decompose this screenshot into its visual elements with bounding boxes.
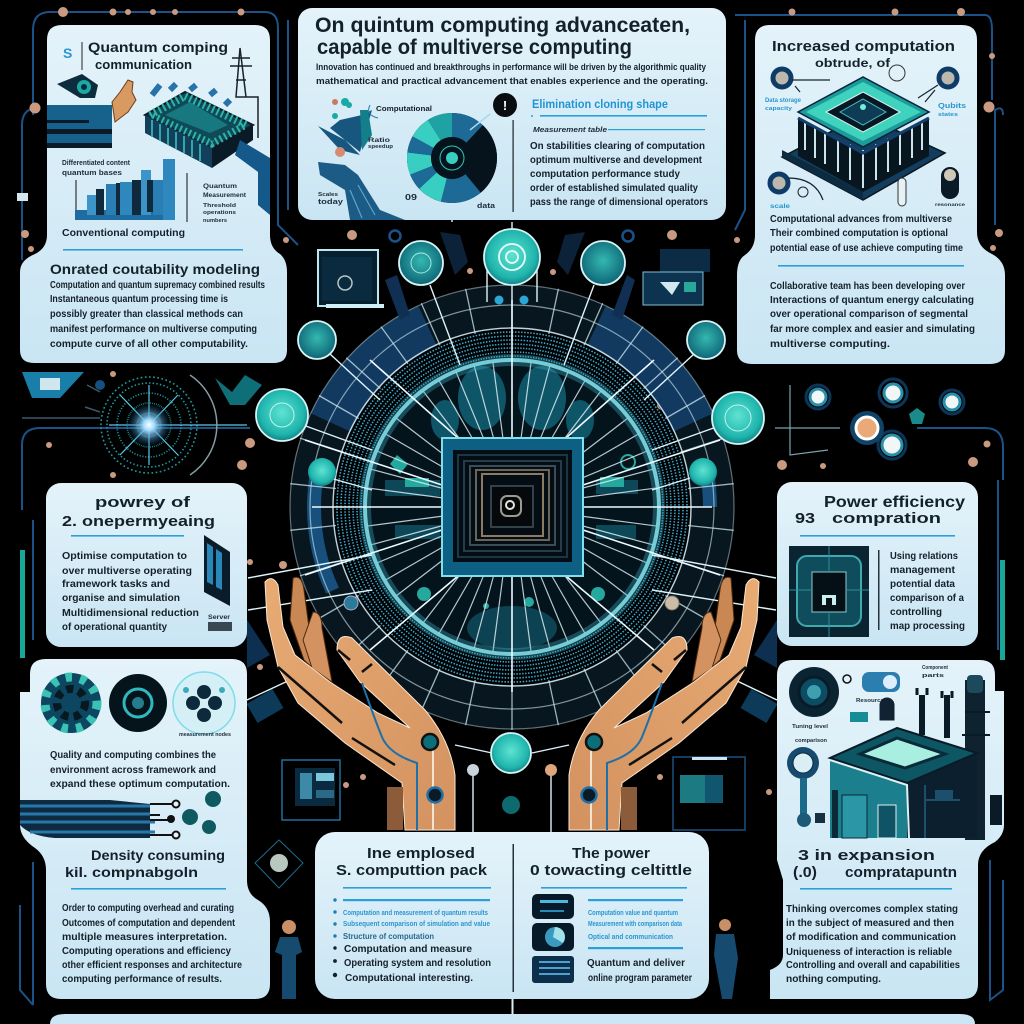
left title: S. computtion pack <box>336 862 488 879</box>
body text lower: Order to computing overhead and curating <box>62 902 234 914</box>
divider <box>71 888 226 890</box>
panel: increased computation <box>737 25 1005 364</box>
body text: Multidimensional reduction <box>62 607 199 619</box>
callout: black marker: ! <box>503 98 507 113</box>
icon: quantum chip <box>145 84 270 215</box>
panel title: Quantum comping <box>88 40 228 55</box>
lower body text: multiverse computing. <box>770 338 890 350</box>
device caption: Server <box>208 615 231 621</box>
panel title <box>772 39 955 81</box>
body text: map processing <box>890 620 965 632</box>
small labels: comparison <box>795 738 827 744</box>
body text: Uniqueness of interaction is reliable <box>786 946 952 958</box>
panel title: compration <box>832 510 941 527</box>
body text <box>62 550 199 633</box>
small monitor right <box>643 249 710 305</box>
body text: of operational quantity <box>62 621 167 633</box>
lower body text <box>770 280 975 350</box>
panel: powery of operating <box>46 483 247 647</box>
outer block ring <box>312 307 712 707</box>
bright ring <box>365 360 659 654</box>
lower body text: over operational comparison of segmental <box>770 308 968 320</box>
icon: server device <box>204 535 230 606</box>
divider <box>800 535 955 537</box>
subtitle: mathematical and practical advancement that enables experience and the operating. <box>316 76 708 87</box>
chip labels: scale <box>770 204 791 210</box>
left rules <box>343 887 491 901</box>
chart labels: numbers <box>203 218 227 224</box>
small labels: Component <box>922 665 948 671</box>
body text: Controlling and overall and capabilities <box>786 959 960 971</box>
chart labels: data <box>477 201 496 210</box>
left list text: Computational interesting. <box>345 973 473 984</box>
chart labels: Differentiated content <box>62 160 131 167</box>
chart labels: operations <box>203 210 236 216</box>
left title <box>336 845 488 879</box>
icon: wrenches <box>850 688 952 738</box>
body text: manifest performance on multiverse computing <box>50 323 257 335</box>
panel title: 3 in expansion <box>798 848 935 864</box>
chart labels: Threshold <box>203 203 236 209</box>
body text lower: Computing operations and efficiency <box>62 945 231 957</box>
body text: Computation and quantum supremacy combined results <box>50 279 265 291</box>
panel: compute pack and tracking <box>315 832 709 999</box>
chip image <box>789 546 869 637</box>
body text: possibly greater than classical methods can <box>50 308 243 320</box>
central processor chip <box>442 438 583 576</box>
small monitor left <box>318 250 384 308</box>
icon: lens dial <box>789 667 839 717</box>
panel: density computing <box>20 659 270 999</box>
icon: cable nodes <box>182 791 221 834</box>
body text <box>890 550 965 632</box>
icon: sleeve and hand <box>47 80 136 148</box>
body text: compute curve of all other computability. <box>50 338 248 350</box>
right hand <box>569 577 759 830</box>
chip labels: resonance <box>935 202 966 207</box>
center divider <box>512 844 514 992</box>
body text: Optimise computation to <box>62 550 187 562</box>
device caption <box>208 615 232 631</box>
body text upper <box>50 749 230 790</box>
chart labels: Conventional computing <box>62 228 185 239</box>
pie dial chart <box>407 113 497 203</box>
body text upper: Quality and computing combines the <box>50 749 216 761</box>
panel title: (.0) <box>793 865 817 881</box>
long rays <box>305 292 720 692</box>
panel title: communication <box>95 58 192 72</box>
chart labels <box>62 160 246 239</box>
hand circuit <box>362 683 417 830</box>
chip labels: Data storage <box>765 98 802 104</box>
right rules and text: Computation value and quantum <box>588 908 678 917</box>
chart labels <box>318 104 496 210</box>
body text <box>786 903 960 985</box>
right top rule <box>541 887 687 889</box>
callout: black marker <box>493 93 517 117</box>
link to bottom strip <box>512 999 514 1014</box>
divider <box>63 249 243 251</box>
right title <box>530 845 692 879</box>
bottom strip panel <box>50 1014 975 1024</box>
icon: tower <box>962 675 990 840</box>
body text: On stabilities clearing of computation <box>530 140 705 152</box>
divider <box>800 888 952 890</box>
icon: atom cluster <box>41 673 101 733</box>
inner dark band <box>365 360 659 654</box>
icon: stacked panel <box>532 956 574 983</box>
icon: key probe <box>787 747 825 827</box>
right title: The power <box>572 845 650 862</box>
chip labels: capacity <box>765 106 792 112</box>
vertical divider <box>512 120 514 212</box>
body text: comparison of a <box>890 592 964 604</box>
sub-heading: Elimination cloning shape <box>532 97 668 111</box>
panel title: 93 <box>795 510 815 527</box>
main title: capable of multiverse computing <box>317 36 632 59</box>
icon: flower node: measurement nodes <box>179 732 231 738</box>
panel: quantum computing headline <box>298 8 726 220</box>
top chain dots <box>21 7 1003 795</box>
small labels <box>792 665 948 744</box>
lower center gadgets <box>247 596 777 888</box>
person right <box>714 919 738 999</box>
body text: framework tasks and <box>62 578 170 590</box>
icon: module <box>532 894 574 919</box>
upper body text: potential ease of use achieve computing time <box>770 242 963 254</box>
panel: quantum computing comparison <box>20 25 287 363</box>
chip labels <box>765 98 966 210</box>
left list text: Subsequent comparison of simulation and value <box>343 919 490 928</box>
caption: Measurement table <box>533 127 607 134</box>
small labels: Tuning level <box>792 724 829 730</box>
right node cluster <box>775 379 964 459</box>
icon: robotic hand <box>318 98 405 220</box>
right rules and text: Quantum and deliver <box>587 958 685 969</box>
central radial chip dial <box>290 285 734 730</box>
chip labels: Qubits <box>938 103 966 110</box>
body text: computation performance study <box>530 168 680 180</box>
body text: order of established simulated quality <box>530 182 698 194</box>
panel title <box>795 494 965 527</box>
divider <box>71 535 184 537</box>
body text: nothing computing. <box>786 973 881 985</box>
body text lower <box>62 902 242 985</box>
right rules and text: online program parameter <box>588 973 692 984</box>
subtitle <box>316 62 708 87</box>
upper body text: Computational advances from multiverse <box>770 213 952 225</box>
satellite nodes <box>256 229 764 773</box>
icon: capacitor <box>798 167 959 206</box>
body text lower: Outcomes of computation and dependent <box>62 917 235 929</box>
lower body text: Interactions of quantum energy calculating <box>770 294 974 306</box>
left list text: Structure of computation <box>343 931 434 941</box>
chart labels: Measurement <box>203 193 246 199</box>
body text: over multiverse operating <box>62 565 192 577</box>
icon: cable bundle <box>20 800 180 838</box>
left dotted star sphere <box>95 375 262 475</box>
panel: power efficiency comparison <box>777 482 978 646</box>
inner teal blobs <box>385 366 638 650</box>
right rules and text <box>587 899 692 984</box>
chart labels: quantum bases <box>62 170 122 177</box>
chart labels: speedup <box>368 144 393 150</box>
panel: expansion comparison <box>770 660 1004 999</box>
outer ring spokes <box>290 289 734 730</box>
body text lower: multiple measures interpretation. <box>62 931 227 943</box>
chevron badge <box>22 372 84 398</box>
subtitle: Innovation has continued and breakthroughs in performance will be driven by the algorithmic quality <box>316 62 707 73</box>
body text upper: environment across framework and <box>50 764 216 776</box>
person left <box>275 920 302 999</box>
icon: server block <box>830 728 1002 838</box>
lower body text: far more complex and easier and simulating <box>770 323 975 335</box>
body text: organise and simulation <box>62 592 180 604</box>
panel title: compratapuntn <box>845 865 957 881</box>
icon: flower node <box>173 672 235 738</box>
panel title: Density consuming <box>91 847 225 863</box>
chart labels: Computational <box>376 104 432 113</box>
panel title <box>793 848 957 881</box>
left list text: Operating system and resolution <box>344 958 491 969</box>
inner rays <box>367 362 657 652</box>
panel title: 2. onepermyeaing <box>62 513 215 530</box>
body text: management <box>890 564 955 576</box>
body text lower: other efficient responses and architecture <box>62 959 242 971</box>
panel title: powrey of <box>95 494 191 511</box>
body text <box>50 279 265 350</box>
icon: orb <box>532 923 574 951</box>
right title: 0 towacting celtittle <box>530 862 692 879</box>
body text: of modification and communication <box>786 931 956 943</box>
panel title <box>82 40 228 72</box>
panel title <box>62 494 215 530</box>
grid arcs <box>310 305 714 709</box>
icon: transmission tower <box>230 48 258 138</box>
lower body text: Collaborative team has been developing over <box>770 280 965 292</box>
section heading: Onrated coutability modeling <box>50 261 260 277</box>
small labels: parts <box>922 673 944 679</box>
chart labels: Scales <box>318 192 338 198</box>
body text: Instantaneous quantum processing time is <box>50 293 228 305</box>
panel number: S <box>63 45 72 61</box>
left hand <box>265 577 455 830</box>
upper body text: Their combined computation is optional <box>770 227 948 239</box>
divider <box>778 265 964 267</box>
rule lines <box>531 115 707 130</box>
body text: pass the range of dimensional operators <box>530 196 708 208</box>
left small lines <box>17 193 100 418</box>
panel title <box>65 847 225 880</box>
chart labels: 09 <box>405 193 418 202</box>
chip labels: states <box>938 112 958 118</box>
small labels: Resource <box>856 698 884 704</box>
panel title: Increased computation <box>772 39 955 55</box>
icon: dark lens <box>109 674 167 732</box>
panel title: kil. compnabgoln <box>65 864 198 880</box>
body text: in the subject of measured and then <box>786 917 954 929</box>
main title: On quintum computing advanceaten, <box>315 14 690 37</box>
chart labels: today <box>318 199 343 206</box>
dot grid ring <box>337 332 687 682</box>
icon: pill badge <box>843 672 900 692</box>
icon: isometric chip <box>782 77 945 200</box>
left bullets <box>333 898 337 977</box>
bar chart <box>75 159 187 222</box>
left list text <box>343 908 491 984</box>
chart labels: Ratio <box>368 137 390 144</box>
left list text: Computation and measurement of quantum results <box>343 908 488 917</box>
body text: controlling <box>890 606 942 618</box>
teal edge bars <box>20 550 1005 660</box>
body text lower: computing performance of results. <box>62 973 222 985</box>
body text: Thinking overcomes complex stating <box>786 903 958 915</box>
left list text: Computation and measure <box>344 944 472 955</box>
left title: Ine emplosed <box>367 845 475 862</box>
right rules and text: Optical and communication <box>588 932 673 941</box>
icon: eye <box>57 74 98 98</box>
upper body text <box>770 213 963 254</box>
small dots and rings around top <box>385 230 635 320</box>
vertical rule <box>878 550 880 630</box>
body text: potential data <box>890 578 955 590</box>
panel title: Power efficiency <box>824 494 965 511</box>
icon: dial nodes <box>770 69 957 200</box>
main title <box>315 14 690 59</box>
right rules and text: Measurement with comparison data <box>588 919 683 928</box>
chart labels: Quantum <box>203 184 237 190</box>
body text <box>530 140 708 208</box>
panel title: obtrude, of <box>815 56 891 70</box>
body text upper: expand these optimum computation. <box>50 778 230 790</box>
body text: optimum multiverse and development <box>530 154 702 166</box>
connector lines to satellite nodes <box>247 200 777 832</box>
body text: Using relations <box>890 550 958 562</box>
